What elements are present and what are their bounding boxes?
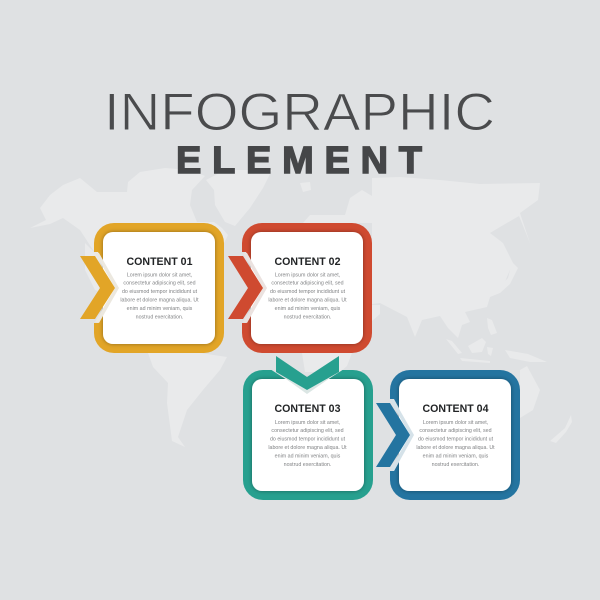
Greenland: [206, 170, 272, 226]
body text: consectetur adipiscing elit, sed: [271, 281, 344, 287]
card: white: [103, 232, 215, 344]
world map: [30, 168, 572, 447]
frame: red: [242, 223, 372, 353]
body text: do eiusmod tempor incididunt ut: [270, 437, 346, 443]
South America: [148, 350, 227, 447]
body text: nostrud exercitation.: [284, 314, 331, 320]
body text: Lorem ipsum dolor sit amet,: [423, 420, 488, 426]
body text: enim ad minim veniam, quis: [275, 306, 341, 312]
Iceland: [300, 182, 311, 192]
body text: [268, 420, 347, 468]
body text: Lorem ipsum dolor sit amet,: [275, 272, 340, 278]
body text: nostrud exercitation.: [284, 462, 331, 468]
arrow: red chevron: [228, 253, 267, 323]
body text: nostrud exercitation.: [136, 314, 183, 320]
Sulawesi: [487, 347, 493, 356]
body text: [416, 420, 495, 468]
panel: content 02: [242, 223, 372, 353]
Australia: [520, 366, 540, 418]
body text: consectetur adipiscing elit, sed: [123, 281, 196, 287]
body text: enim ad minim veniam, quis: [275, 453, 341, 459]
body text: [268, 272, 347, 320]
body text: labore et dolore magna aliqua. Ut: [268, 298, 347, 304]
heading: CONTENT 03: [275, 403, 341, 415]
North America: [30, 168, 228, 340]
body text: Lorem ipsum dolor sit amet,: [275, 420, 340, 426]
New Zealand: [550, 415, 572, 443]
body text: Lorem ipsum dolor sit amet,: [127, 272, 192, 278]
body text: labore et dolore magna aliqua. Ut: [416, 445, 495, 451]
Sumatra: [446, 339, 462, 354]
Eurasia: [303, 177, 540, 338]
heading: CONTENT 01: [127, 256, 193, 268]
card: white: [252, 379, 364, 491]
Arabia: [372, 305, 380, 321]
title: INFOGRAPHIC: INFOGRAPHIC: [104, 83, 495, 142]
New Guinea: [505, 350, 547, 362]
panel: content 03: [243, 370, 373, 500]
frame: blue: [390, 370, 520, 500]
body text: [120, 272, 199, 320]
body text: do eiusmod tempor incididunt ut: [270, 289, 346, 295]
arrow: yellow chevron: [80, 253, 119, 323]
panel: content 04: [390, 370, 520, 500]
body text: labore et dolore magna aliqua. Ut: [120, 298, 199, 304]
body text: consectetur adipiscing elit, sed: [271, 428, 344, 434]
heading: CONTENT 04: [423, 403, 489, 415]
body text: enim ad minim veniam, quis: [423, 453, 489, 459]
frame: yellow: [94, 223, 224, 353]
Japan: [498, 262, 518, 293]
arrow: teal chevron: [272, 356, 343, 394]
card: white: [399, 379, 511, 491]
Borneo: [468, 338, 486, 353]
body text: consectetur adipiscing elit, sed: [419, 428, 492, 434]
heading: CONTENT 02: [275, 256, 341, 268]
Africa: [302, 353, 352, 372]
panel: content 01: [94, 223, 224, 353]
body text: enim ad minim veniam, quis: [127, 306, 193, 312]
body text: do eiusmod tempor incididunt ut: [122, 289, 198, 295]
arrow: blue chevron: [376, 400, 414, 471]
title: ELEMENT: ELEMENT: [176, 140, 422, 182]
body text: do eiusmod tempor incididunt ut: [418, 437, 494, 443]
Philippines: [487, 318, 497, 335]
card: white: [251, 232, 363, 344]
frame: teal: [243, 370, 373, 500]
body text: nostrud exercitation.: [432, 462, 479, 468]
body text: labore et dolore magna aliqua. Ut: [268, 445, 347, 451]
Java: [460, 358, 490, 363]
